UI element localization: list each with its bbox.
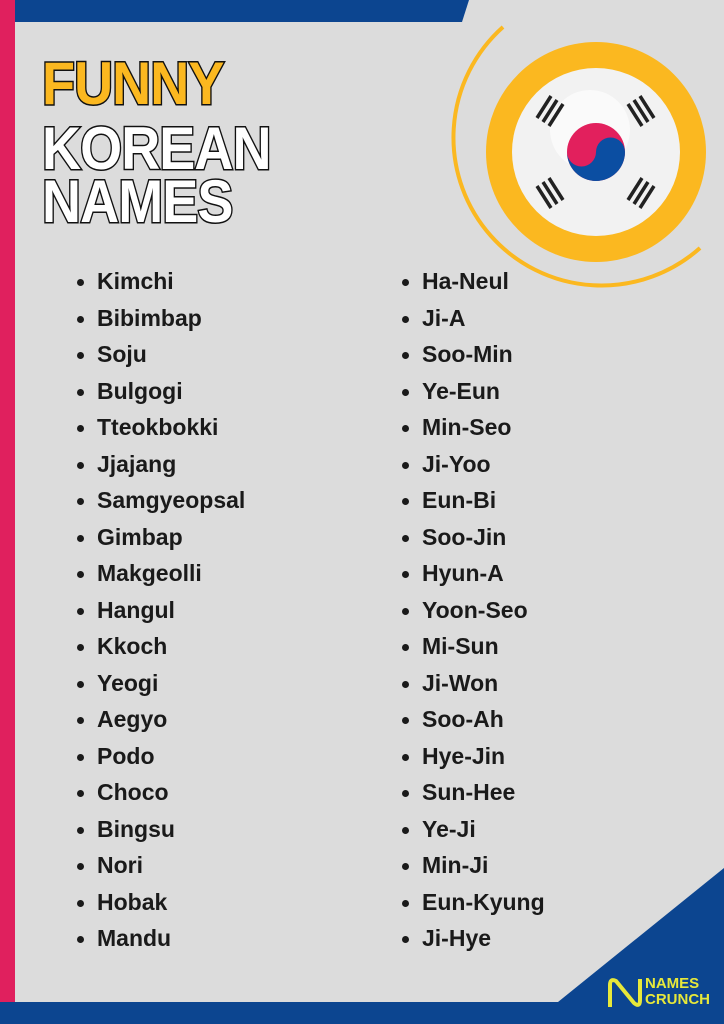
left pink bar [0,0,15,1024]
logo: NAMES [645,975,699,992]
list: left column: Soju [97,341,147,367]
list: left column: Bingsu [97,816,175,842]
list: left column: Gimbap [97,524,183,550]
list: right column: Soo-Ah [422,706,504,732]
list: left column: Hobak [97,888,167,914]
list: left column: Aegyo [97,706,167,732]
list: right column: Hyun-A [422,560,504,586]
list: left column: Mandu [97,925,171,951]
list: right column: Mi-Sun [422,633,499,659]
list: left column: Podo [97,742,154,768]
list: right column: Ji-Won [422,670,498,696]
title: FUNNY [42,50,224,117]
list: right column: Ji-Yoo [422,450,491,476]
list: left column: Hangul [97,596,175,622]
list: right column: Ha-Neul [422,268,509,294]
flag ball icon [451,26,706,288]
list: right column: Ji-A [422,304,465,330]
list: right column: Yoon-Seo [422,596,528,622]
logo: CRUNCH [645,991,710,1008]
list: left column: Jjajang [97,450,176,476]
list: left column: Tteokbokki [97,414,218,440]
list: right column: Eun-Kyung [422,888,545,914]
title: NAMES [42,168,233,235]
title: KOREAN [42,115,271,182]
list: right column [402,268,545,951]
logo [608,975,710,1008]
list: right column: Min-Seo [422,414,511,440]
list: left column: Kkoch [97,633,167,659]
list: right column: Hye-Jin [422,742,505,768]
list: right column: Ye-Ji [422,816,476,842]
list: right column: Min-Ji [422,852,488,878]
list: left column: Choco [97,779,169,805]
list: right column: Eun-Bi [422,487,496,513]
list: left column: Bulgogi [97,378,183,404]
list: right column: Soo-Min [422,341,513,367]
title [42,50,271,235]
list: right column: Soo-Jin [422,524,506,550]
list: left column: Bibimbap [97,304,202,330]
list: left column: Makgeolli [97,560,202,586]
list: right column: Sun-Hee [422,779,515,805]
list: left column [77,268,245,951]
bottom blue shapes [0,868,724,1024]
list: left column: Kimchi [97,268,174,294]
list: left column: Nori [97,852,143,878]
list: right column: Ye-Eun [422,378,500,404]
list: left column: Samgyeopsal [97,487,245,513]
list: right column: Ji-Hye [422,925,491,951]
list: left column: Yeogi [97,670,158,696]
